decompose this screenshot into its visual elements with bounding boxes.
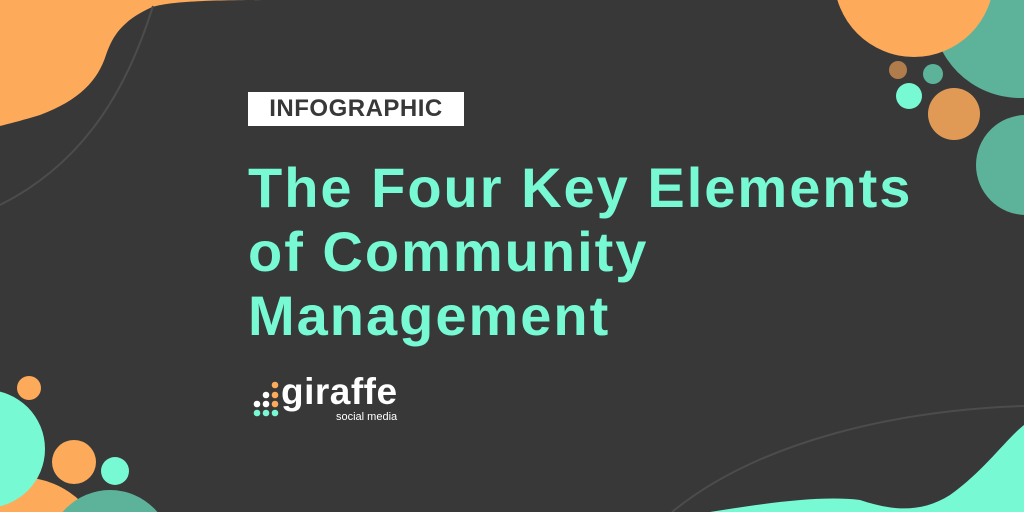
- bottom-left circles: [0, 477, 108, 512]
- icon: dots: [254, 382, 278, 416]
- orange blob top-left: [0, 0, 290, 126]
- title: of Community: [248, 220, 648, 283]
- logo: giraffe social media: [254, 371, 398, 423]
- label: INFOGRAPHIC: [248, 92, 464, 126]
- title: [248, 156, 912, 347]
- label: INFOGRAPHIC: INFOGRAPHIC: [269, 95, 443, 122]
- title: Management: [248, 284, 610, 347]
- logo: giraffe social media: giraffe: [281, 371, 398, 412]
- mint blob bottom-right: [710, 425, 1024, 512]
- title: The Four Key Elements: [248, 156, 912, 219]
- logo: giraffe social media: social media: [336, 411, 397, 423]
- top-right circles: [932, 0, 1024, 98]
